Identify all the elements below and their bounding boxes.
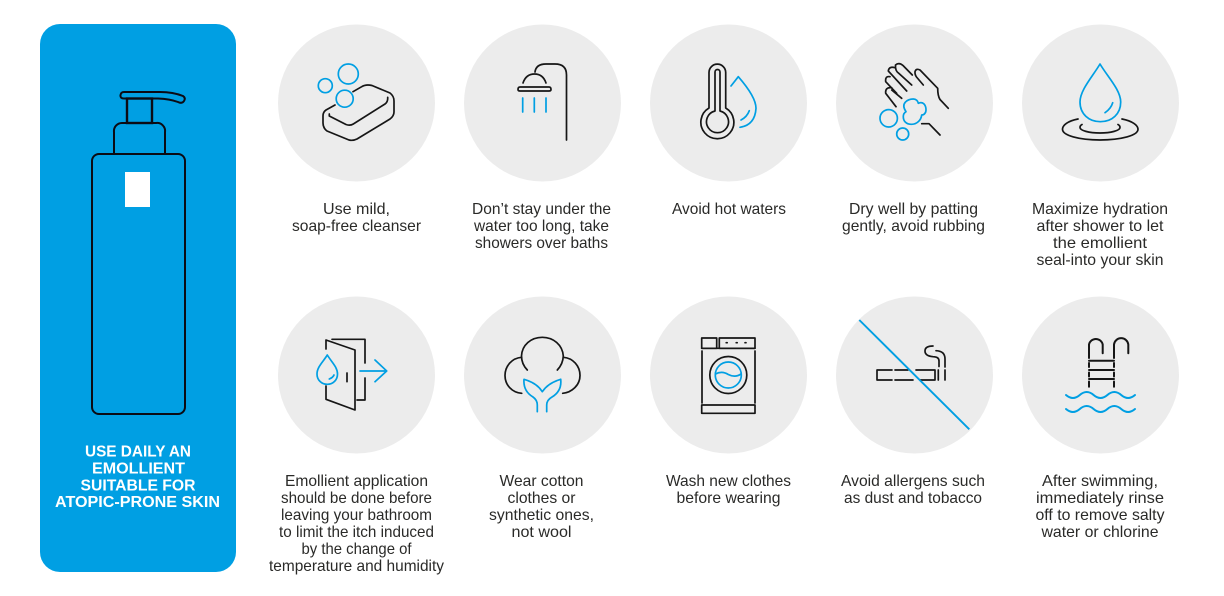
text: wash new clothes: Wash new clothes xyxy=(666,473,791,490)
text: wear cotton: Wear cotton xyxy=(500,473,584,490)
text: emollient application xyxy=(269,473,444,575)
text: maximize hydration: seal-into your skin xyxy=(1036,252,1164,269)
icon: hand and bubbles xyxy=(880,64,948,140)
icon: pool ladder and waves xyxy=(1066,338,1135,412)
text: avoid hot waters: Avoid hot waters xyxy=(672,201,786,218)
text: maximize hydration: Maximize hydration xyxy=(1032,201,1168,218)
text: emollient application: temperature and humidity xyxy=(269,558,444,575)
icon: crossed-out cigarette xyxy=(859,320,969,429)
panel: short showers xyxy=(464,24,621,252)
text: shower advice: showers over baths xyxy=(475,235,608,252)
text: avoid allergens xyxy=(841,473,985,507)
text: maximize hydration xyxy=(1032,201,1168,269)
text: use mild cleanser: soap-free cleanser xyxy=(292,218,422,235)
heading: use daily an emollient: USE DAILY AN xyxy=(85,444,191,460)
text: wear cotton: synthetic ones, xyxy=(489,507,594,524)
text: emollient application: to limit the itch induced xyxy=(279,524,434,541)
icon: soap and bubbles xyxy=(318,64,394,140)
text: avoid allergens: as dust and tobacco xyxy=(844,490,982,507)
text: shower advice: water too long, take xyxy=(473,218,609,235)
icon: shower xyxy=(518,64,566,140)
text: avoid allergens: Avoid allergens such xyxy=(841,473,985,490)
panel: avoid hot water xyxy=(650,24,807,218)
panel: mild cleanser xyxy=(278,24,435,235)
icon: door with drop and arrow xyxy=(317,339,387,410)
text: after swimming: immediately rinse xyxy=(1036,490,1164,507)
text: emollient application: leaving your bathroom xyxy=(281,507,432,524)
text: use mild cleanser xyxy=(292,201,422,235)
text: dry by patting: gently, avoid rubbing xyxy=(842,218,985,235)
text: wear cotton: not wool xyxy=(512,524,572,541)
text: maximize hydration: after shower to let xyxy=(1036,218,1164,235)
panel: apply before leaving bathroom xyxy=(269,296,444,575)
panel: rinse after swimming xyxy=(1022,296,1179,541)
text: use mild cleanser: Use mild, xyxy=(323,201,390,218)
text: emollient application: by the change of xyxy=(302,541,412,558)
text: wear cotton: clothes or xyxy=(508,490,576,507)
heading: use daily an emollient xyxy=(55,444,220,511)
text: emollient application: should be done before xyxy=(281,490,432,507)
icon: thermometer and drop xyxy=(701,64,756,139)
heading: use daily an emollient: SUITABLE FOR xyxy=(80,478,196,494)
text: after swimming xyxy=(1036,473,1164,541)
text: emollient application: Emollient application xyxy=(285,473,428,490)
panel: dry by patting xyxy=(836,24,993,235)
text: maximize hydration: the emollient xyxy=(1053,235,1148,252)
text: shower advice: Don’t stay under the xyxy=(472,201,611,218)
text: wear cotton xyxy=(489,473,594,541)
text: wash new clothes xyxy=(666,473,791,507)
panel: maximize hydration xyxy=(1022,24,1179,269)
panel: wear cotton xyxy=(464,296,621,541)
panel: wash new clothes xyxy=(650,296,807,507)
text: shower advice xyxy=(472,201,611,252)
text: dry by patting xyxy=(842,201,985,235)
text: dry by patting: Dry well by patting xyxy=(849,201,978,218)
icon: washing machine xyxy=(702,338,755,413)
text: wash new clothes: before wearing xyxy=(676,490,780,507)
text: after swimming: off to remove salty xyxy=(1036,507,1164,524)
icon: cotton plant xyxy=(505,337,580,412)
icon: pump bottle xyxy=(92,92,185,414)
heading: use daily an emollient: ATOPIC-PRONE SKIN xyxy=(55,494,220,511)
text: after swimming: After swimming, xyxy=(1042,473,1158,490)
icon: water drop and ripples xyxy=(1062,64,1138,140)
heading: use daily an emollient: EMOLLIENT xyxy=(92,460,186,478)
panel: avoid allergens xyxy=(836,296,993,507)
panel: emollient xyxy=(40,24,236,572)
text: after swimming: water or chlorine xyxy=(1041,524,1159,541)
